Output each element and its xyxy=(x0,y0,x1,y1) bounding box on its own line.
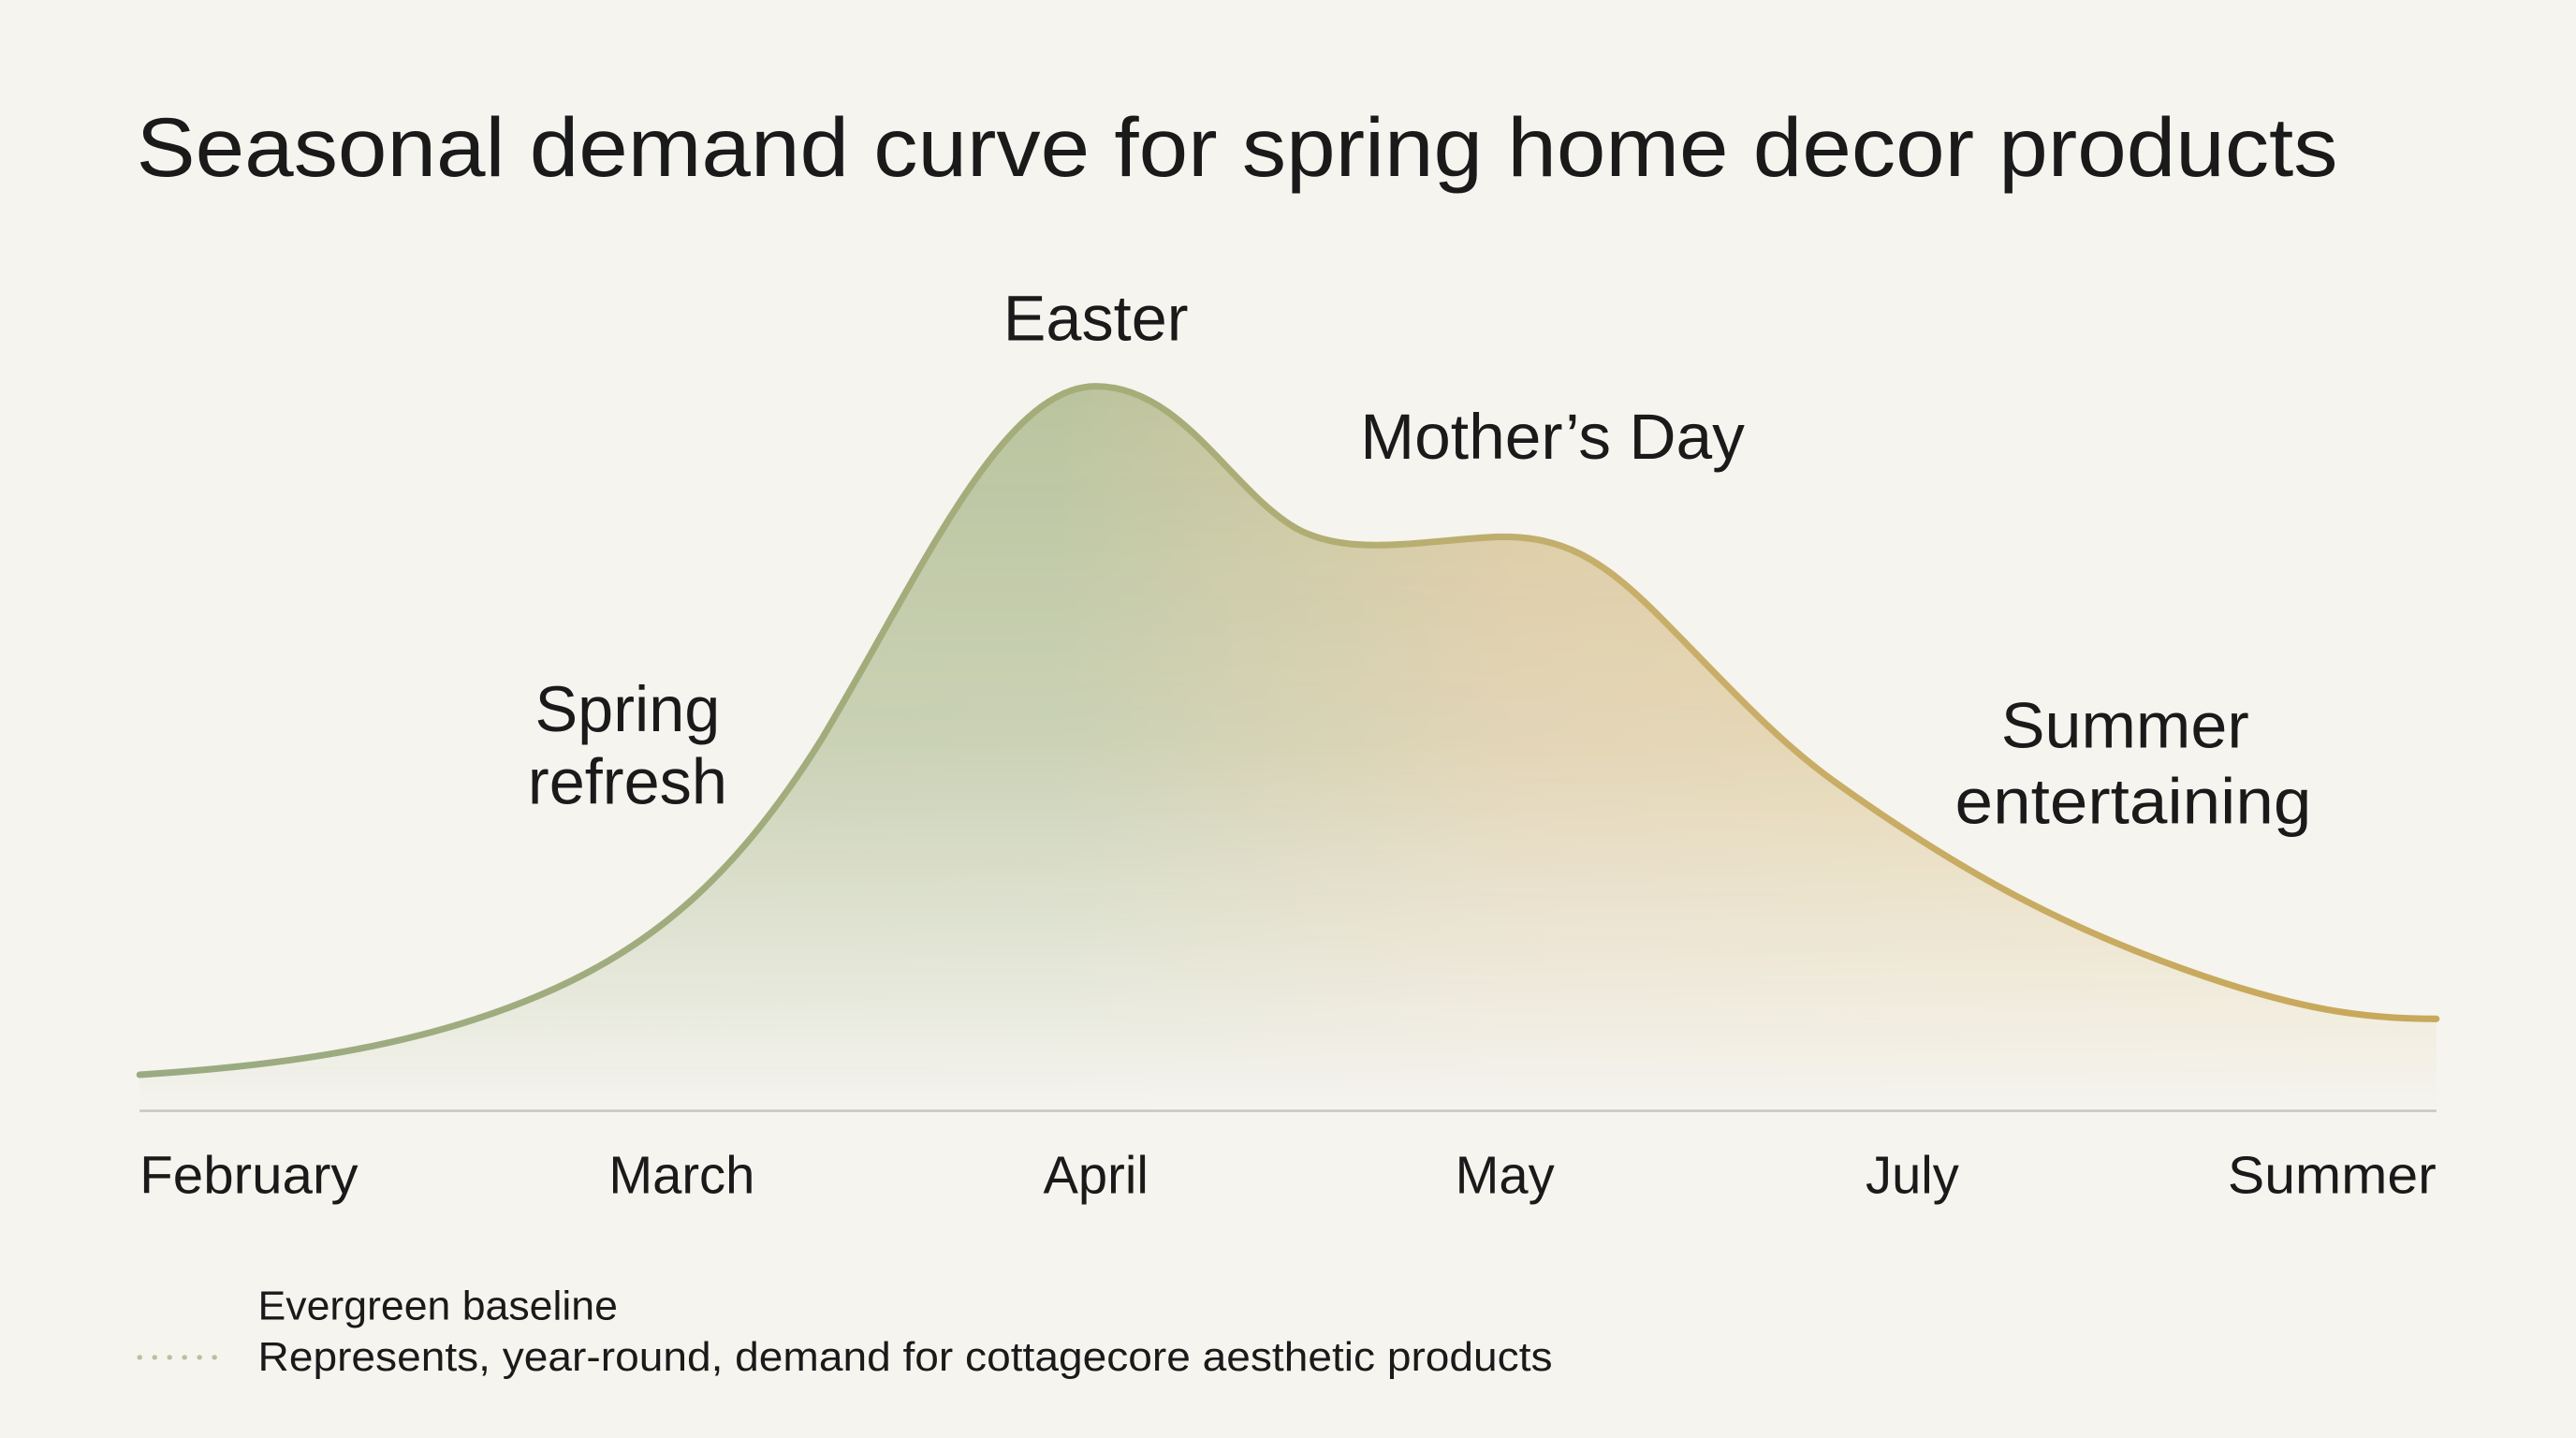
annotation: Summer entertaining: Summer xyxy=(2001,690,2249,762)
legend: Represents, year-round, demand for cottagecore aesthetic products xyxy=(258,1334,1553,1380)
axis labels: July xyxy=(1866,1145,1959,1204)
axis labels: Summer xyxy=(2228,1145,2437,1204)
legend dotted line xyxy=(139,1356,228,1358)
axis labels: May xyxy=(1456,1145,1555,1204)
curve line xyxy=(139,387,2437,1075)
annotation: Summer entertaining: entertaining xyxy=(1955,765,2311,837)
legend: Evergreen baseline xyxy=(258,1283,618,1328)
axis labels xyxy=(139,1145,2437,1204)
axis labels: April xyxy=(1043,1145,1149,1204)
axis labels: February xyxy=(139,1145,359,1204)
annotation: Spring refresh: refresh xyxy=(528,745,727,817)
axis labels: March xyxy=(608,1145,754,1204)
annotation: Easter: Easter xyxy=(1003,282,1189,354)
legend xyxy=(139,1283,1553,1380)
area fill xyxy=(300,389,2437,1063)
annotation: Spring refresh: Spring xyxy=(535,673,720,745)
annotation: Mother's Day: Mother’s Day xyxy=(1360,401,1746,473)
x axis xyxy=(139,1110,2437,1112)
chart: demand curve xyxy=(139,387,2437,1111)
title: Seasonal demand curve for spring home decor products xyxy=(137,100,2338,194)
